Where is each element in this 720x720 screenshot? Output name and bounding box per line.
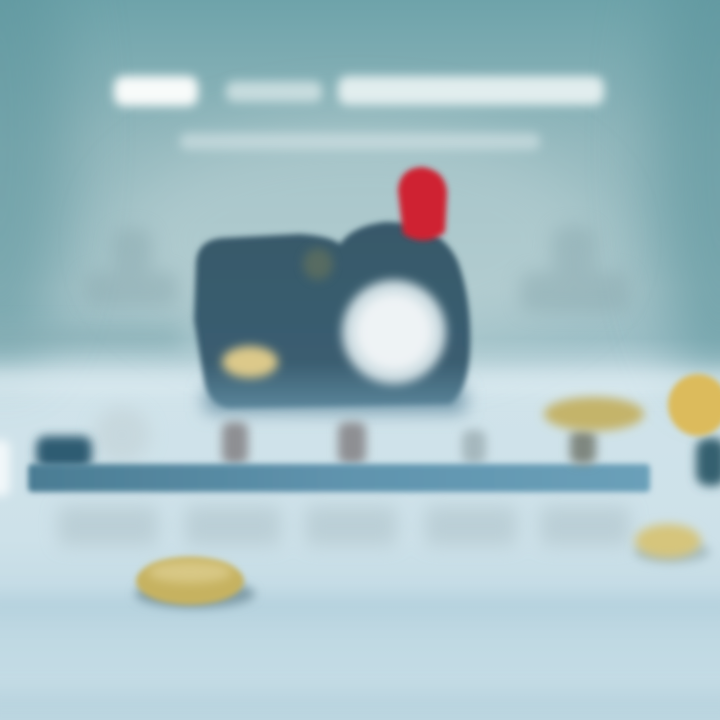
red button	[398, 167, 447, 241]
coin: lower right	[634, 524, 710, 563]
dark block	[36, 436, 92, 468]
camera lens	[342, 280, 446, 384]
coin: lower left	[135, 557, 255, 608]
left faded chart	[84, 228, 178, 306]
right faded chart	[520, 226, 630, 312]
coin: top right on stand	[544, 397, 644, 464]
faded labels under bar	[58, 506, 630, 546]
white glare left	[0, 440, 10, 496]
subtitle	[180, 133, 540, 150]
camera stud	[303, 248, 333, 280]
camera icon	[194, 167, 470, 412]
small globe	[36, 407, 150, 468]
coin: far right	[668, 374, 720, 486]
camera shadow	[205, 388, 465, 412]
timeline bar	[28, 464, 650, 492]
camera legs	[222, 422, 486, 464]
camera body	[194, 222, 470, 408]
title	[114, 76, 604, 106]
gold badge	[222, 346, 278, 378]
